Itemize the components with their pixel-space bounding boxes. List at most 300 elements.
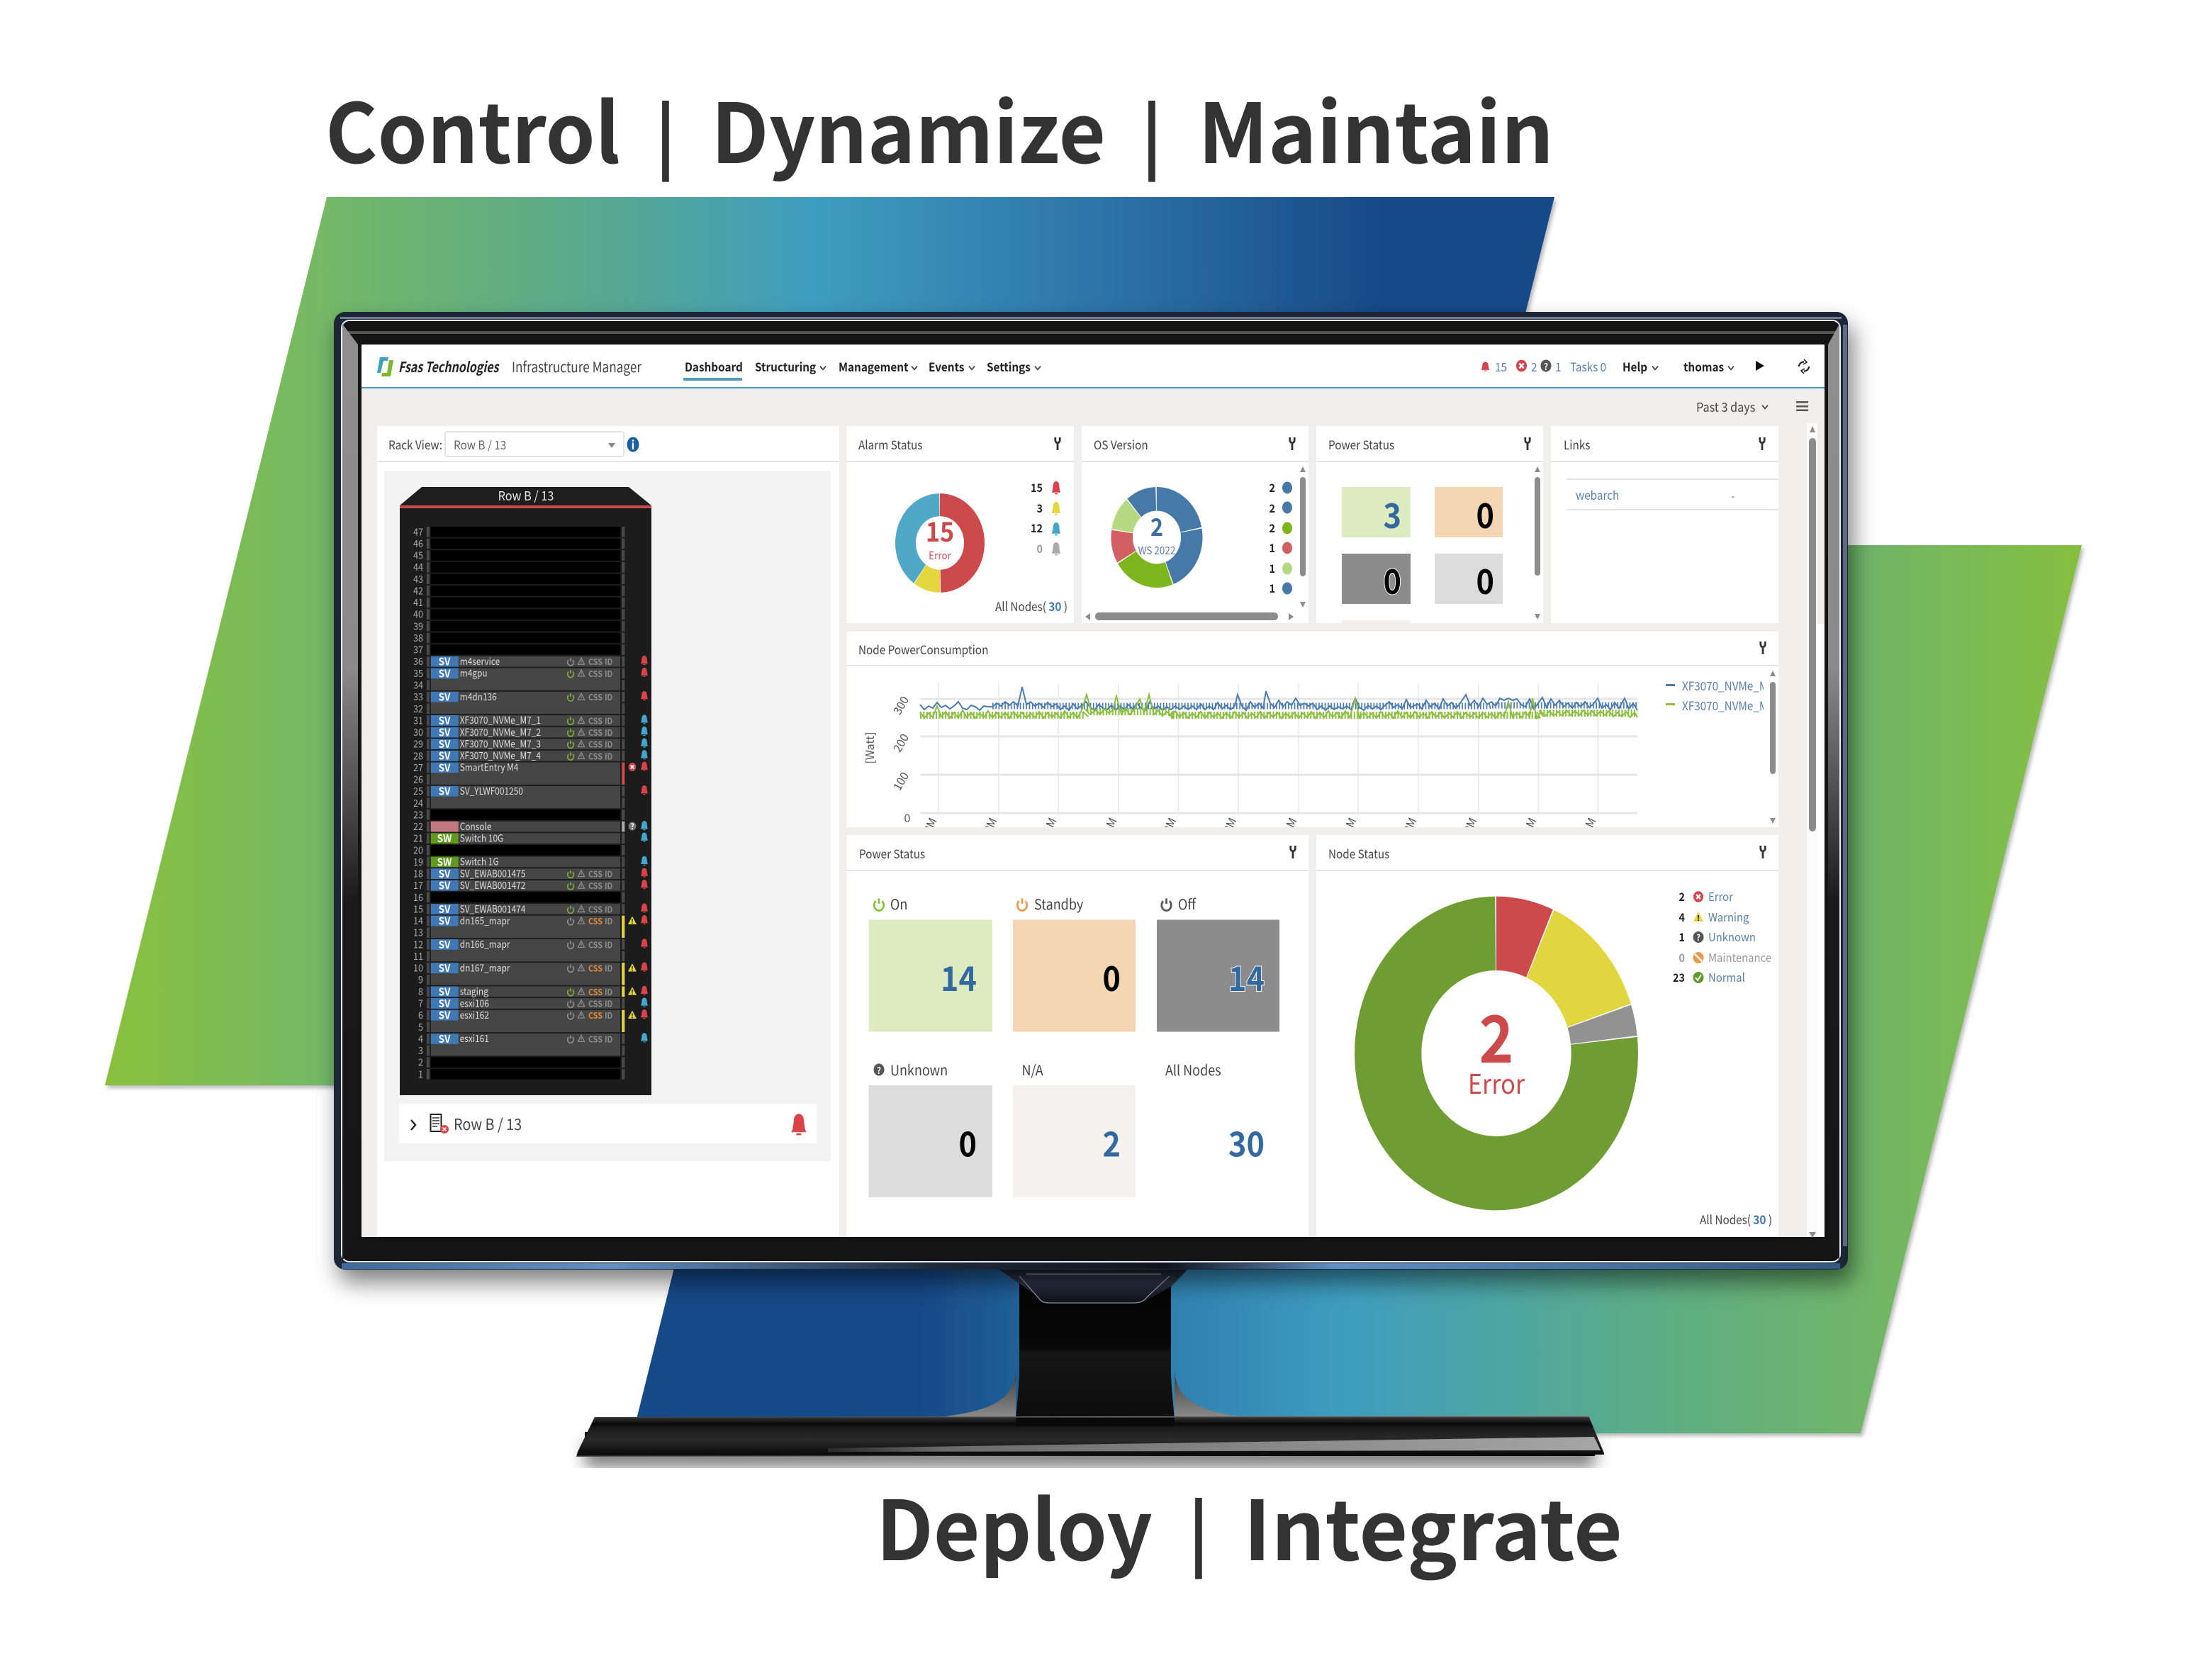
x axis tick labels: PM — [1158, 814, 1180, 836]
monitor stand — [576, 1265, 1604, 1457]
device: XF3070_NVMe_M7_1: CSS — [588, 715, 603, 727]
alarm donut — [892, 490, 988, 596]
rack unit numbers: 22 — [413, 819, 423, 833]
rack title: Row B / 13 — [498, 486, 554, 504]
icon: red bell — [791, 1114, 807, 1135]
rack unit numbers: 26 — [413, 772, 423, 786]
rack unit numbers: 19 — [413, 854, 423, 868]
rack unit numbers: 27 — [413, 760, 423, 774]
device: esxi161: CSS — [588, 1034, 603, 1046]
OS legend — [1270, 479, 1292, 596]
device: esxi162: CSS — [588, 1009, 603, 1021]
device: SmartEntry M4: SV — [439, 759, 451, 775]
panel: alarm status: Alarm Status — [858, 435, 922, 453]
x axis tick labels: AM — [1338, 814, 1360, 836]
panel: node power consumption — [846, 632, 1786, 836]
icon: rack with error — [431, 1114, 449, 1133]
rack unit numbers: 39 — [413, 619, 423, 633]
alarm legend: 3 — [1037, 500, 1043, 516]
panel: links — [1551, 426, 1778, 623]
y axis labels: 200 — [888, 730, 912, 755]
device: XF3070_NVMe_M7_2: CSS — [588, 727, 603, 739]
alarm legend — [1031, 479, 1060, 556]
alarm legend: 0 — [1037, 540, 1043, 556]
panel: power status summary: Power Status — [1328, 435, 1394, 453]
rack unit numbers: 40 — [413, 607, 423, 621]
rack unit numbers: 35 — [413, 666, 423, 680]
tile: on: On — [890, 894, 907, 914]
rack unit numbers: 12 — [413, 937, 423, 951]
title: Control | Dynamize | Maintain: | — [1141, 79, 1162, 183]
tile: unknown: ? — [877, 1063, 881, 1077]
OS legend: 1 — [1270, 539, 1275, 556]
x axis tick labels: PM — [1458, 814, 1481, 836]
series: blue node — [920, 687, 1637, 710]
device: dn165_mapr: SV — [439, 913, 451, 929]
device: m4service: ID — [605, 656, 612, 668]
device: XF3070_NVMe_M7_2: SV — [439, 724, 451, 740]
tile: standby: 0 — [1476, 489, 1494, 539]
rack unit numbers: 45 — [413, 548, 423, 562]
device: SV_EWAB001472: SV — [439, 878, 451, 893]
nav: Dashboard: Dashboard — [685, 357, 743, 375]
device: dn167_mapr: CSS — [588, 963, 603, 975]
device: XF3070_NVMe_M7_4: XF3070_NVMe_M7_4 — [460, 748, 541, 762]
device: XF3070_NVMe_M7_4: ID — [605, 751, 612, 763]
chart legend: XF3070_NVMe_M7_2 — [1682, 696, 1786, 714]
device: XF3070_NVMe_M7_2 — [431, 724, 648, 740]
link row: webarch — [1576, 486, 1619, 503]
device: dn165_mapr — [431, 913, 648, 938]
rack unit numbers: 42 — [413, 583, 423, 598]
x axis tick labels: AM — [1038, 814, 1060, 836]
device: dn166_mapr — [431, 936, 648, 961]
device: SV_EWAB001474: SV — [439, 901, 451, 917]
rack unit numbers: 41 — [413, 595, 423, 609]
device: XF3070_NVMe_M7_3 — [431, 736, 648, 751]
rack unit numbers: 17 — [413, 878, 423, 892]
OS legend: 2 — [1270, 479, 1275, 495]
y axis labels: 100 — [888, 768, 912, 793]
device: m4service — [431, 654, 648, 669]
device: m4dn136: CSS — [588, 691, 603, 703]
device: m4gpu: ID — [605, 668, 612, 680]
device: Switch 1G: SW — [437, 853, 452, 870]
server rack — [400, 486, 651, 1095]
alarm count: 15 — [926, 511, 954, 550]
device: esxi162 — [431, 1007, 648, 1032]
node status donut — [1353, 895, 1640, 1211]
top navigation bar — [362, 345, 1825, 388]
device: SV_EWAB001472: CSS — [588, 880, 603, 892]
OS legend: 1 — [1270, 560, 1275, 576]
panel: alarm status: Error — [929, 547, 951, 563]
rack unit numbers: 33 — [413, 689, 423, 703]
device: dn167_mapr: ID — [605, 963, 612, 975]
device: SV_EWAB001472: ID — [605, 880, 612, 892]
tile: on: 14 — [941, 952, 977, 1002]
error count: 2 — [1479, 987, 1513, 1082]
title: Control | Dynamize | Maintain — [325, 68, 1554, 187]
node status legend: Error — [1708, 887, 1734, 905]
nav: Management: Management — [839, 357, 909, 375]
device: m4dn136: m4dn136 — [460, 689, 497, 703]
tile: on — [1342, 487, 1411, 539]
y axis labels — [861, 693, 912, 826]
device: dn166_mapr: dn166_mapr — [460, 936, 510, 951]
device: esxi106: esxi106 — [460, 995, 489, 1010]
panel: node status: Error — [1468, 1063, 1525, 1102]
device: m4dn136: SV — [439, 689, 451, 705]
tile: off: 0 — [1384, 555, 1401, 605]
dashboard screen — [362, 345, 1825, 1238]
rack unit numbers: 4 — [418, 1031, 423, 1046]
rack unit numbers: 47 — [413, 525, 423, 539]
rack unit numbers: 6 — [418, 1007, 423, 1021]
rack rails and empty slots — [428, 527, 623, 1080]
device: m4service: m4service — [460, 654, 500, 668]
rack unit numbers: 10 — [413, 961, 423, 975]
tile: unknown: 0 — [959, 1118, 977, 1167]
panel: node status — [1316, 835, 1778, 1237]
alert counters: ? — [1544, 359, 1548, 373]
device: esxi161: SV — [439, 1031, 451, 1046]
device: esxi161: ID — [605, 1034, 612, 1046]
rack selector — [445, 432, 624, 457]
rack unit numbers: 28 — [413, 749, 423, 763]
panel: OS version: WS 2022 — [1138, 542, 1175, 558]
icon: info — [627, 435, 639, 453]
device: SV_YLWF001250: SV — [439, 783, 451, 799]
y axis labels: 0 — [904, 809, 911, 826]
icon: info: i — [632, 435, 634, 453]
rack unit numbers: 36 — [413, 654, 423, 668]
node status legend: ? — [1696, 931, 1700, 943]
device: SV_EWAB001474: SV_EWAB001474 — [460, 901, 525, 916]
OS scrollbars — [1085, 466, 1306, 620]
title: Deploy | Integrate: | — [1188, 1477, 1209, 1580]
title: Deploy | Integrate: Integrate — [1243, 1465, 1623, 1584]
device: Console — [431, 819, 648, 833]
tile: unknown: 0 — [1476, 555, 1494, 605]
tile: standby — [1013, 894, 1136, 1032]
panel: OS version: OS Version — [1094, 435, 1148, 453]
alert counters: Tasks 0 — [1570, 357, 1606, 375]
device: XF3070_NVMe_M7_2: XF3070_NVMe_M7_2 — [460, 724, 541, 739]
tile: not available — [1013, 1060, 1136, 1197]
icon: refresh — [1799, 359, 1809, 374]
device: Console: Console — [460, 819, 491, 833]
rack unit numbers: 44 — [413, 559, 423, 573]
rack unit numbers: 16 — [413, 890, 423, 904]
device: Switch 10G: Switch 10G — [460, 830, 503, 845]
tile: unknown: Unknown — [890, 1060, 948, 1080]
device: esxi106: SV — [439, 995, 451, 1011]
rack unit numbers: 8 — [418, 984, 423, 998]
device: XF3070_NVMe_M7_3: XF3070_NVMe_M7_3 — [460, 736, 541, 751]
rack unit numbers: 11 — [413, 948, 423, 963]
x axis tick labels — [924, 818, 1596, 827]
panel: rack view — [377, 426, 839, 1237]
panel: power status detail — [846, 835, 1308, 1237]
link row: - — [1732, 488, 1735, 503]
tile: on: 3 — [1384, 489, 1401, 539]
device: XF3070_NVMe_M7_1: SV — [439, 712, 451, 728]
device: XF3070_NVMe_M7_4 — [431, 748, 648, 763]
device: Switch 10G: SW — [437, 830, 452, 846]
rack unit numbers: 14 — [413, 913, 423, 927]
OS count: 2 — [1150, 508, 1163, 544]
device: m4dn136 — [431, 689, 648, 714]
node status legend: 0 — [1679, 949, 1685, 965]
x axis tick labels: AM — [1518, 814, 1540, 836]
device: SV_EWAB001472 — [431, 878, 648, 893]
device: staging: SV — [439, 983, 451, 999]
device: esxi106 — [431, 995, 648, 1011]
device: dn167_mapr: SV — [439, 960, 451, 975]
title: Deploy | Integrate — [876, 1465, 1623, 1584]
alert counters: 15 — [1495, 357, 1507, 375]
monitor frame — [334, 312, 1848, 1270]
rack selector: Row B / 13 — [454, 435, 506, 453]
rack unit numbers: 21 — [413, 831, 423, 845]
device: SV_YLWF001250 — [431, 783, 648, 808]
tile: not available: 2 — [1103, 1118, 1121, 1167]
icon: play — [1756, 361, 1764, 371]
device: SV_EWAB001472: SV_EWAB001472 — [460, 878, 525, 892]
title: Deploy | Integrate: Deploy — [876, 1465, 1153, 1584]
rack unit numbers: 23 — [413, 807, 423, 822]
stand base — [576, 1416, 1604, 1457]
device: SmartEntry M4: SmartEntry M4 — [460, 760, 518, 774]
tile: all nodes: All Nodes — [1165, 1060, 1221, 1080]
rack unit numbers: 37 — [413, 642, 423, 656]
tile: all nodes: 30 — [1228, 1118, 1265, 1167]
rack unit numbers: 34 — [413, 678, 423, 692]
x axis tick labels: AM — [1278, 814, 1301, 836]
power scrollbar — [1535, 466, 1540, 620]
background shape: upper parallelogram — [105, 197, 1554, 1085]
device: esxi162: esxi162 — [460, 1007, 489, 1021]
all nodes count: All Nodes( 30 ) — [995, 597, 1067, 615]
help menu: Help — [1623, 357, 1647, 375]
device: SV_EWAB001475 — [431, 866, 648, 881]
device: dn166_mapr: SV — [439, 936, 451, 952]
device: XF3070_NVMe_M7_4: CSS — [588, 751, 603, 763]
panel: power status summary — [1316, 426, 1543, 623]
alarm legend: 15 — [1031, 479, 1043, 495]
device: XF3070_NVMe_M7_1: XF3070_NVMe_M7_1 — [460, 712, 541, 727]
panel: links: Links — [1564, 435, 1590, 453]
tile: off — [1157, 894, 1279, 1032]
tile: off — [1342, 554, 1411, 605]
panel: node power consumption: Node PowerConsumption — [858, 640, 988, 658]
tile: off: Off — [1178, 894, 1197, 914]
device: Switch 1G: Switch 1G — [460, 854, 499, 868]
node status legend — [1673, 887, 1771, 985]
chart legend — [1666, 682, 1764, 712]
device: Switch 1G — [431, 853, 648, 870]
device: XF3070_NVMe_M7_3: SV — [439, 736, 451, 751]
rack list row — [399, 1104, 817, 1143]
node status legend: Normal — [1708, 968, 1745, 985]
stand collar — [994, 1266, 1191, 1303]
device: dn166_mapr: CSS — [588, 939, 603, 951]
product name: Infrastructure Manager — [512, 356, 642, 376]
rack unit numbers: 5 — [418, 1019, 423, 1034]
device: XF3070_NVMe_M7_4: SV — [439, 748, 451, 763]
rack unit numbers: 20 — [413, 843, 423, 857]
page scrollbar — [1807, 423, 1824, 1238]
device: XF3070_NVMe_M7_2: ID — [605, 727, 612, 739]
rack unit numbers: 3 — [418, 1043, 423, 1057]
device: m4service: CSS — [588, 656, 603, 668]
nav: Settings: Settings — [987, 357, 1031, 375]
panel: alarm status — [846, 426, 1074, 623]
device: esxi161 — [431, 1031, 648, 1055]
device: esxi106: CSS — [588, 998, 603, 1010]
line chart — [918, 683, 1637, 836]
device: XF3070_NVMe_M7_3: CSS — [588, 739, 603, 751]
node status legend: Maintenance — [1708, 948, 1771, 965]
y axis labels: [Watt] — [861, 732, 878, 764]
node status legend: 2 — [1679, 888, 1685, 905]
title: Control | Dynamize | Maintain: Control — [325, 68, 620, 187]
device: SV_EWAB001475: SV_EWAB001475 — [460, 866, 525, 880]
chart scrollbar — [1770, 671, 1776, 824]
stand base shadow — [585, 1432, 1595, 1456]
device: dn167_mapr — [431, 960, 648, 985]
rack unit numbers: 46 — [413, 536, 423, 550]
rack unit numbers: 29 — [413, 737, 423, 751]
rack unit numbers: 2 — [418, 1055, 423, 1069]
rack unit numbers: 13 — [413, 925, 423, 939]
tile: not available: N/A — [1021, 1060, 1043, 1080]
all nodes count: All Nodes( 30 ) — [1700, 1210, 1772, 1228]
OS legend: 2 — [1270, 500, 1275, 516]
icon: menu — [1796, 401, 1808, 411]
device: SV_EWAB001474 — [431, 901, 648, 917]
device: esxi162: ID — [605, 1009, 612, 1021]
device: m4dn136: ID — [605, 691, 612, 703]
tile: unknown — [1435, 554, 1503, 605]
alert counters: 2 — [1531, 357, 1537, 375]
rack list row: Row B / 13 — [454, 1113, 522, 1135]
device: SV_EWAB001475: SV — [439, 866, 451, 881]
device: m4service: SV — [439, 654, 451, 669]
tile: off: 14 — [1228, 952, 1265, 1002]
chart legend: XF3070_NVMe_M7_1 — [1682, 676, 1786, 694]
device: m4gpu: m4gpu — [460, 666, 488, 680]
node status legend: Warning — [1708, 908, 1749, 925]
device: SV_EWAB001474: CSS — [588, 904, 603, 916]
device: staging: CSS — [588, 986, 603, 998]
OS legend: 2 — [1270, 520, 1275, 536]
tile: standby — [1435, 487, 1503, 539]
OS legend: 1 — [1270, 580, 1275, 596]
title: Control | Dynamize | Maintain: Maintain — [1198, 68, 1554, 187]
alert counters — [1481, 357, 1606, 375]
rack unit numbers: 30 — [413, 724, 423, 739]
tile: standby: 0 — [1103, 952, 1121, 1002]
panel: power status detail: Power Status — [859, 844, 925, 862]
user menu: thomas — [1683, 357, 1724, 375]
rack unit numbers: 24 — [413, 795, 423, 810]
title: Control | Dynamize | Maintain: Dynamize — [711, 68, 1106, 187]
x axis tick labels: PM — [1398, 814, 1420, 836]
background shape: lower parallelogram — [633, 545, 2082, 1433]
device: m4gpu — [431, 665, 648, 690]
device: dn167_mapr: dn167_mapr — [460, 960, 510, 975]
x axis tick labels: PM — [918, 814, 941, 836]
node status legend: 4 — [1679, 909, 1685, 925]
alarm legend: 12 — [1031, 520, 1043, 536]
device: staging: staging — [460, 984, 488, 998]
device: SmartEntry M4 — [431, 759, 648, 785]
node status legend: Unknown — [1708, 928, 1756, 945]
nav: Events: Events — [929, 357, 964, 375]
device: dn165_mapr: dn165_mapr — [460, 913, 510, 927]
link row — [1576, 486, 1735, 503]
x axis tick labels: PM — [978, 814, 1001, 836]
device: SV_EWAB001475: ID — [605, 868, 612, 880]
device: m4gpu: SV — [439, 665, 451, 681]
time range selector: Past 3 days — [1696, 397, 1755, 415]
rack unit numbers — [413, 525, 423, 1081]
rack unit numbers: 31 — [413, 713, 423, 727]
rack unit numbers: 43 — [413, 571, 423, 586]
y axis labels: 300 — [888, 693, 912, 717]
device: staging: ID — [605, 986, 612, 998]
rack unit numbers: 25 — [413, 783, 423, 797]
device: SV_EWAB001474: ID — [605, 904, 612, 916]
device: dn166_mapr: ID — [605, 939, 612, 951]
device: XF3070_NVMe_M7_3: ID — [605, 739, 612, 751]
title: Control | Dynamize | Maintain: | — [655, 79, 676, 183]
x axis tick labels: AM — [1098, 814, 1121, 836]
series: green node — [920, 695, 1637, 718]
tile: unknown — [869, 1060, 992, 1197]
device: SV_EWAB001475: CSS — [588, 868, 603, 880]
device: Console: ? — [630, 821, 634, 832]
device: staging — [431, 983, 648, 999]
panel: node status: Node Status — [1328, 844, 1389, 862]
rack view label: Rack View: — [388, 435, 442, 453]
device: XF3070_NVMe_M7_1 — [431, 712, 648, 728]
device: dn165_mapr: ID — [605, 915, 612, 927]
stand neck — [1016, 1265, 1175, 1426]
logo — [377, 357, 393, 376]
alert counters: 1 — [1555, 357, 1561, 375]
OS donut — [1108, 483, 1206, 591]
rack unit numbers: 7 — [418, 996, 423, 1010]
device: Switch 10G — [431, 830, 648, 846]
tile: on — [869, 894, 992, 1032]
rack unit numbers: 38 — [413, 630, 423, 644]
nav: Structuring: Structuring — [755, 357, 817, 375]
rack unit numbers: 15 — [413, 902, 423, 916]
rack unit numbers: 1 — [418, 1067, 423, 1081]
node status legend: 23 — [1673, 969, 1685, 985]
rack unit numbers: 32 — [413, 701, 423, 715]
tile: standby: Standby — [1034, 894, 1083, 914]
device: esxi162: SV — [439, 1007, 451, 1023]
brand name: Fsas Technologies — [398, 357, 500, 377]
device: esxi161: esxi161 — [460, 1031, 489, 1046]
device: m4gpu: CSS — [588, 668, 603, 680]
panel: OS version — [1082, 426, 1308, 623]
device: esxi106: ID — [605, 998, 612, 1010]
